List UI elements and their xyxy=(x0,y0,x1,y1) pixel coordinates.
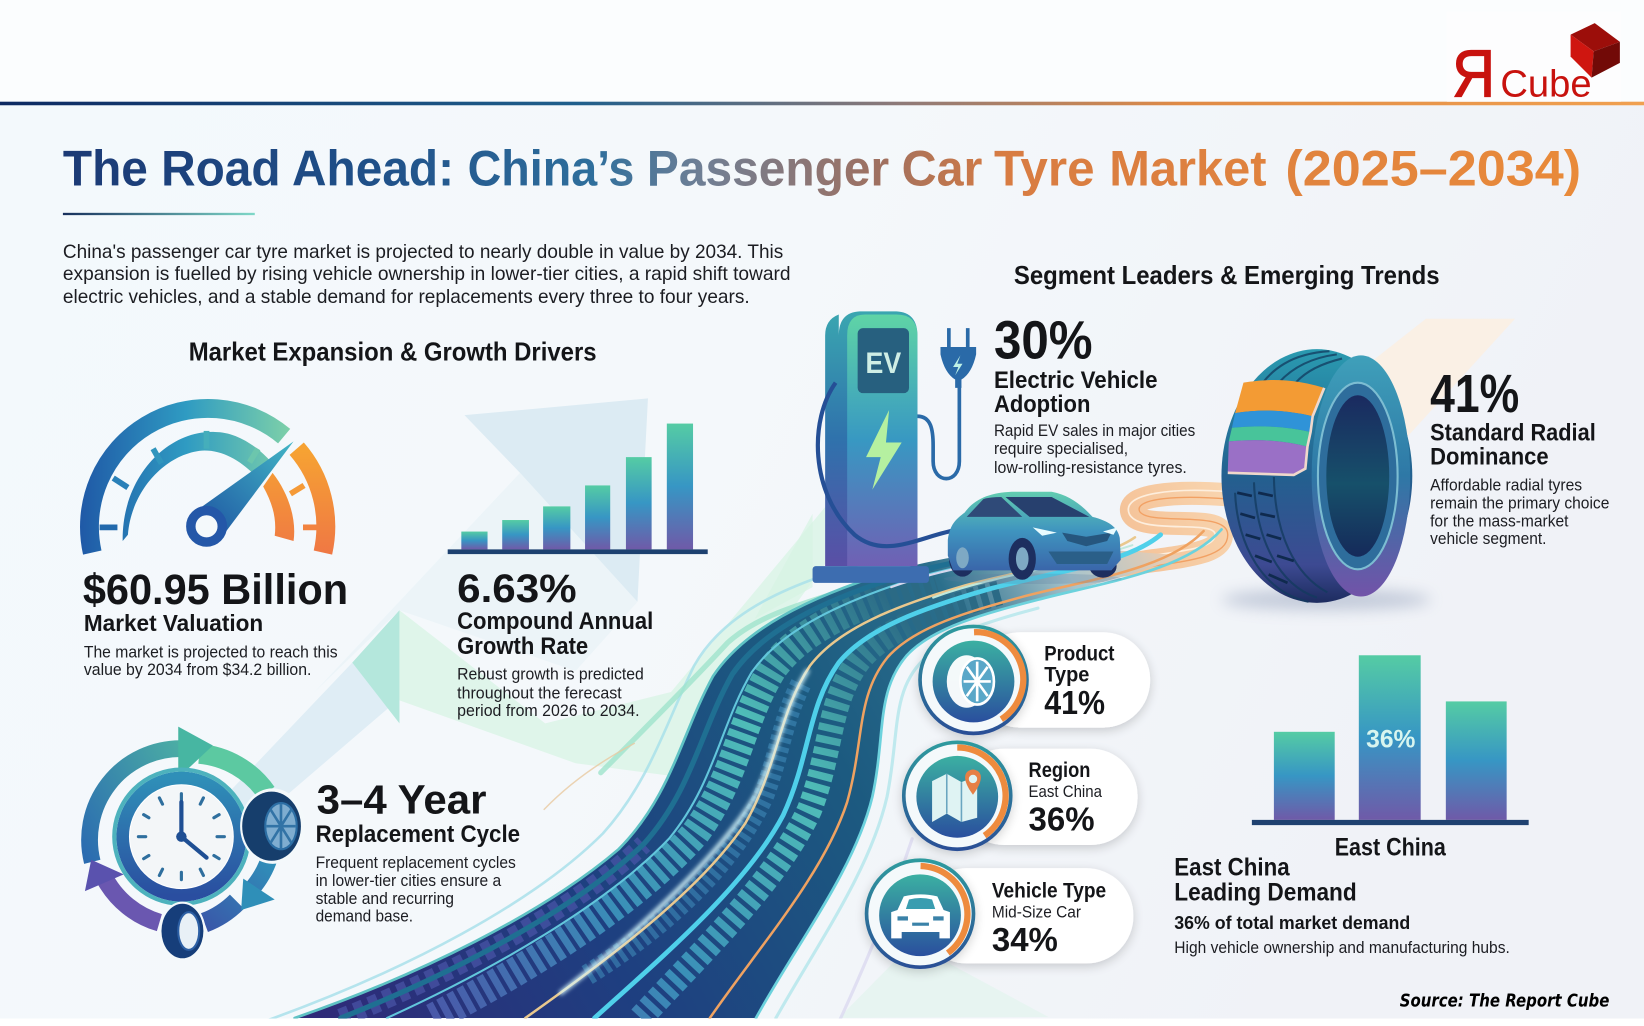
logo: Я xyxy=(1452,36,1495,111)
pill: region: 36% xyxy=(1029,801,1095,838)
text: EV adoption xyxy=(994,312,1195,477)
text: CAGR: throughout the ferecast xyxy=(457,684,622,702)
pill: region: East China xyxy=(1029,783,1103,801)
text: CAGR: Growth Rate xyxy=(457,633,588,660)
pill: vehicle type: Mid-Size Car xyxy=(992,903,1082,921)
pill: product type: 41% xyxy=(1044,685,1105,722)
plug xyxy=(949,328,968,347)
text: CAGR: period from 2026 to 2034. xyxy=(457,702,640,720)
text: radial dominance: for the mass-market xyxy=(1430,512,1569,530)
bar chart: east china: East China xyxy=(1335,834,1447,862)
bottom white strip xyxy=(0,1019,1644,1026)
title underline xyxy=(63,213,255,215)
text: CAGR: Compound Annual xyxy=(457,608,653,635)
bar chart: east china: 36% xyxy=(1366,726,1415,754)
title: Tyre xyxy=(994,140,1095,197)
pill: region xyxy=(904,742,1138,849)
pill: vehicle type xyxy=(867,860,1133,967)
text: EV adoption: Rapid EV sales in major cities xyxy=(994,422,1195,440)
road tail orange xyxy=(1048,490,1229,588)
text: market valuation: The market is projected to reach this xyxy=(84,643,338,661)
EV charging pump xyxy=(813,311,976,583)
gauge icon xyxy=(89,408,326,553)
tyre cross-section xyxy=(1221,349,1431,610)
text: market valuation: value by 2034 from $34.2 billion. xyxy=(84,661,311,679)
text: market valuation: Market Valuation xyxy=(84,610,263,636)
pill: product type xyxy=(920,626,1150,733)
pill: region: Region xyxy=(1029,759,1090,782)
title: China’s xyxy=(468,140,634,197)
text: radial dominance: Standard Radial xyxy=(1430,419,1596,446)
bar chart: growth xyxy=(448,424,708,554)
title: Car xyxy=(902,140,982,197)
text: market valuation xyxy=(83,566,348,679)
heading: market expansion: Market Expansion & Growth Drivers xyxy=(189,337,597,367)
text: market valuation: $60.95 Billion xyxy=(83,566,348,614)
title: Passenger xyxy=(647,140,889,197)
road outer streaks xyxy=(262,556,1038,1022)
text: EV adoption: low-rolling-resistance tyres. xyxy=(994,459,1187,477)
road xyxy=(262,490,1229,1022)
intro paragraph: expansion is fuelled by rising vehicle ownership in lower-tier cities, a rapid shift toward xyxy=(63,263,791,285)
tread blocks xyxy=(341,580,1001,1018)
road surface xyxy=(295,545,1185,1018)
bar chart: east china xyxy=(1252,655,1529,862)
clock cycle icon xyxy=(85,727,305,960)
text: replacement cycle: demand base. xyxy=(316,908,413,926)
background arrows xyxy=(210,319,1515,1018)
text: replacement cycle: Replacement Cycle xyxy=(316,821,520,848)
text: CAGR: 6.63% xyxy=(457,567,577,611)
text: radial dominance: Affordable radial tyres xyxy=(1430,477,1582,495)
text: radial dominance: vehicle segment. xyxy=(1430,530,1546,548)
intro paragraph: electric vehicles, and a stable demand for replacements every three to four years. xyxy=(63,286,750,308)
text: replacement cycle: stable and recurring xyxy=(316,890,454,908)
intro paragraph xyxy=(63,241,791,308)
source note: Source: The Report Cube xyxy=(1400,990,1609,1011)
logo: Cube xyxy=(1500,62,1592,104)
text: EV adoption: Adoption xyxy=(994,391,1090,418)
logo xyxy=(1447,12,1621,111)
electric car xyxy=(944,492,1122,584)
lane lines xyxy=(295,529,1221,1018)
text: CAGR: Rebust growth is predicted xyxy=(457,665,644,683)
text: radial dominance xyxy=(1430,365,1609,548)
text: CAGR xyxy=(457,567,653,720)
text: radial dominance: Dominance xyxy=(1430,443,1549,470)
intro paragraph: China's passenger car tyre market is projected to nearly double in value by 2034. This xyxy=(63,241,783,263)
text: radial dominance: 41% xyxy=(1430,365,1519,424)
text: east china leading demand xyxy=(1174,853,1510,957)
text: east china leading demand: East China xyxy=(1174,853,1291,881)
title: The Road Ahead: xyxy=(63,140,454,197)
top banner xyxy=(0,0,1644,102)
text: replacement cycle xyxy=(316,777,520,926)
text: EV adoption: Electric Vehicle xyxy=(994,367,1158,394)
EV charging pump: EV xyxy=(866,347,902,380)
text: replacement cycle: in lower-tier cities ensure a xyxy=(316,872,502,890)
text: EV adoption: 30% xyxy=(994,312,1093,371)
heading: segment leaders: Segment Leaders & Emerging Trends xyxy=(1014,260,1440,290)
top gradient line xyxy=(0,102,1644,105)
title: (2025–2034) xyxy=(1285,140,1581,197)
text: east china leading demand: High vehicle ownership and manufacturing hubs. xyxy=(1174,938,1510,957)
text: east china leading demand: Leading Demand xyxy=(1174,879,1357,907)
pill: product type: Product xyxy=(1044,643,1115,666)
text: east china leading demand: 36% of total market demand xyxy=(1174,912,1410,933)
text: replacement cycle: 3–4 Year xyxy=(317,777,487,823)
text: replacement cycle: Frequent replacement cycles xyxy=(316,854,516,872)
pill: product type: Type xyxy=(1044,663,1089,686)
pill: vehicle type: Vehicle Type xyxy=(992,879,1106,902)
text: radial dominance: remain the primary choice xyxy=(1430,494,1609,512)
text: EV adoption: require specialised, xyxy=(994,440,1128,458)
pill: vehicle type: 34% xyxy=(992,922,1058,959)
title: Market xyxy=(1109,140,1267,197)
